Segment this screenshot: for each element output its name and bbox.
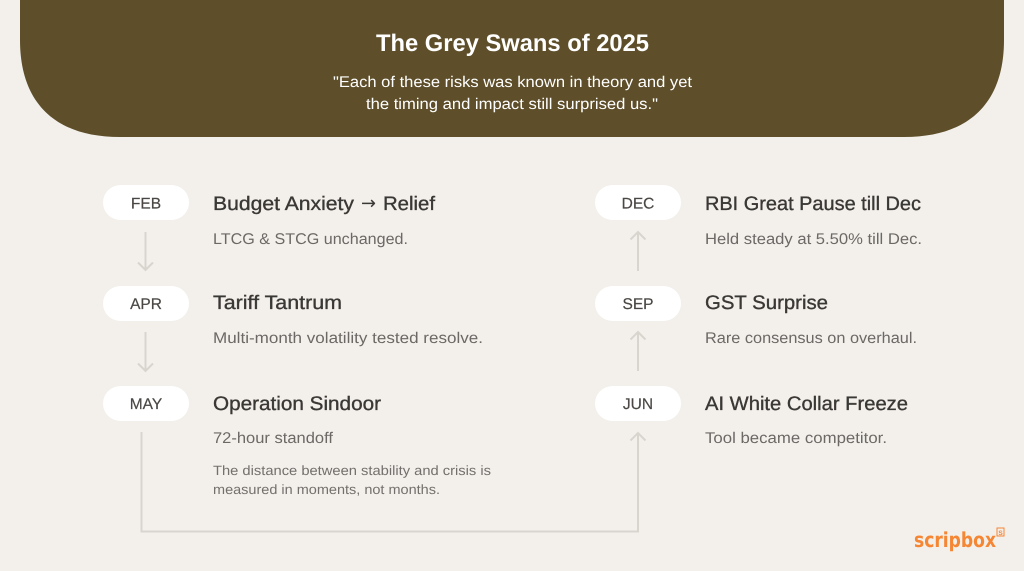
entry: FEB: Relief	[383, 193, 436, 215]
header banner	[20, 0, 1004, 137]
entry: SEP	[595, 286, 917, 347]
logo: scripbox: scripbox	[914, 528, 996, 552]
entry: MAY: Operation Sindoor	[213, 393, 382, 415]
entry: MAY: The distance between stability and crisis is	[213, 463, 491, 478]
entry: FEB: LTCG & STCG unchanged.	[213, 231, 408, 248]
entry: JUN: JUN	[623, 396, 653, 413]
arrow: APR to MAY	[138, 332, 153, 371]
entry: DEC: Held steady at 5.50% till Dec.	[705, 231, 922, 248]
arrow: SEP to DEC	[630, 232, 646, 271]
entry: DEC: RBI Great Pause till Dec	[705, 193, 921, 215]
entry: SEP: SEP	[622, 296, 654, 313]
entry: FEB: FEB	[131, 196, 161, 212]
entry: FEB: →	[361, 193, 376, 214]
entry: APR	[103, 286, 483, 347]
arrow: FEB to APR	[138, 232, 153, 270]
entry: MAY: 72-hour standoff	[213, 430, 334, 447]
entry: APR: Multi-month volatility tested resolve.	[213, 330, 483, 347]
logo: scripbox: S	[998, 530, 1003, 537]
entry: APR: Tariff Tantrum	[213, 292, 342, 314]
entry: FEB	[103, 185, 436, 248]
entry: MAY: MAY	[130, 396, 162, 413]
title: The Grey Swans of 2025	[376, 30, 649, 57]
entry: JUN	[595, 386, 908, 447]
arrow: MAY to JUN connector	[142, 432, 646, 532]
entry: JUN: Tool became competitor.	[705, 430, 887, 447]
arrow: JUN to SEP	[630, 332, 646, 371]
entry: APR: APR	[130, 296, 162, 313]
entry: DEC	[595, 185, 922, 248]
entry: FEB: Budget Anxiety	[213, 193, 354, 215]
entry: DEC: DEC	[622, 196, 654, 212]
subtitle: "Each of these risks was known in theory and yet	[333, 74, 693, 91]
entry: JUN: AI White Collar Freeze	[705, 393, 908, 415]
subtitle: the timing and impact still surprised us."	[366, 96, 658, 113]
entry: MAY	[103, 386, 491, 497]
entry: SEP: Rare consensus on overhaul.	[705, 330, 917, 347]
subtitle	[333, 74, 693, 113]
entry: MAY: measured in moments, not months.	[213, 482, 440, 497]
entry: SEP: GST Surprise	[705, 292, 828, 314]
